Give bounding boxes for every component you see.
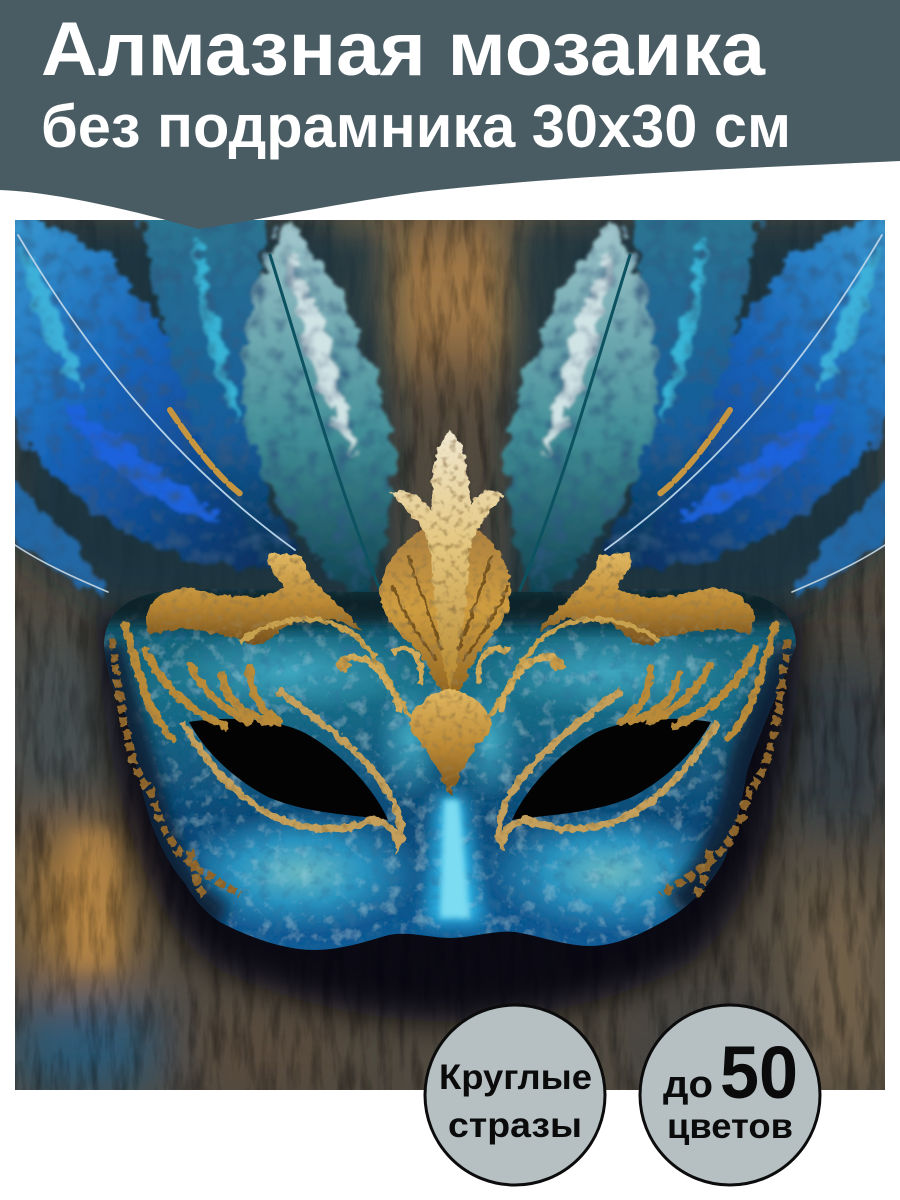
painted background — [15, 220, 885, 1090]
subtitle: без подрамника 30х30 см — [41, 93, 791, 160]
badge text: up to: до — [663, 1064, 713, 1106]
feathers: right — [504, 212, 895, 610]
central gold fleur ornament — [380, 430, 510, 795]
product image: carnival mask painting — [5, 212, 895, 1090]
badge text line 2: стразы — [448, 1106, 582, 1145]
title: Алмазная мозаика — [41, 7, 766, 92]
badge text: colours: цветов — [667, 1107, 793, 1146]
feathers: left — [5, 212, 396, 610]
badge number 50: 50 — [720, 1031, 798, 1114]
badge: round rhinestones — [425, 1005, 605, 1185]
mask body — [104, 588, 796, 950]
badge: up to 50 colours — [640, 1005, 820, 1185]
mask shadow — [95, 610, 805, 1022]
badge text line 1: Круглые — [439, 1058, 592, 1097]
header banner — [0, 0, 900, 229]
gold scrollwork: left — [112, 552, 425, 897]
gold scrollwork: right — [475, 552, 788, 897]
eye holes — [189, 719, 711, 820]
